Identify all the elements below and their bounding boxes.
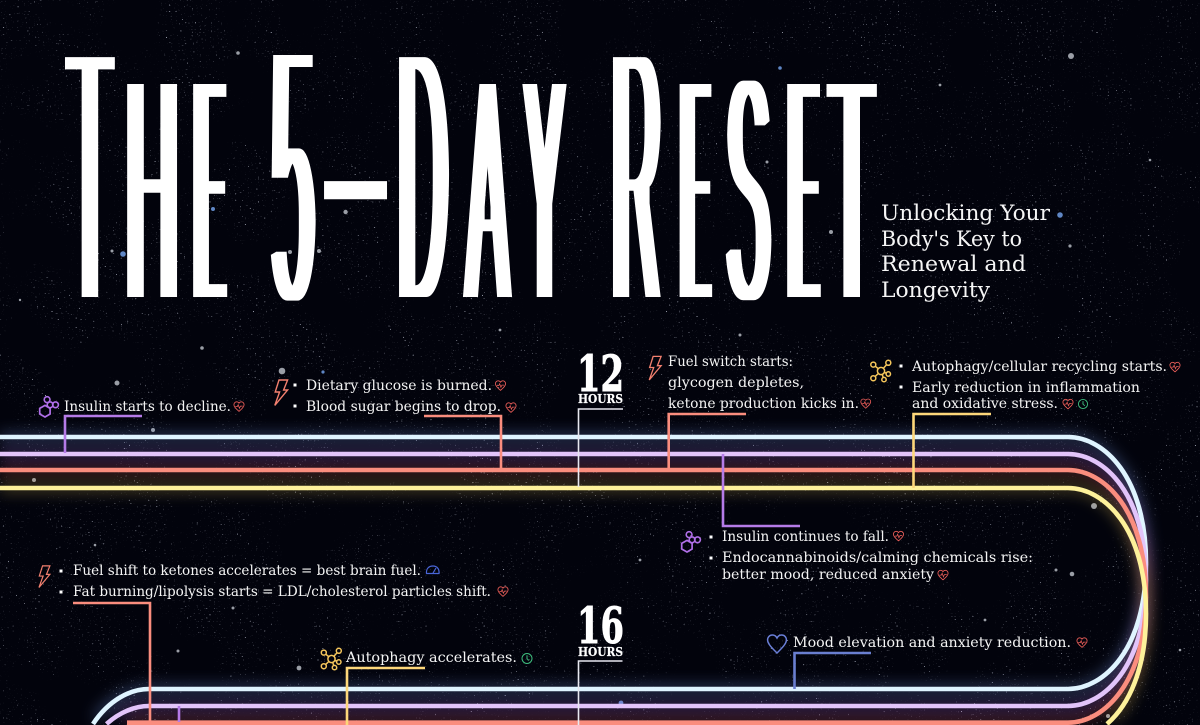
icon: lightning bolt [649, 356, 661, 380]
callout: insulin continues to fall: better mood, reduced anxiety [722, 567, 935, 583]
icon: heart pulse [498, 587, 508, 596]
track: lilac [0, 454, 1146, 724]
icon: network [321, 648, 341, 670]
callout: fuel shift to ketones [39, 563, 508, 722]
icon: heart pulse [495, 381, 506, 390]
callout: autophagy starts [871, 359, 1180, 488]
subtitle [881, 201, 1051, 303]
callout: fuel switch: Fuel switch starts: [668, 354, 793, 370]
connector [914, 414, 991, 488]
connector [73, 603, 150, 722]
16 hours marker [577, 596, 624, 725]
callout: insulin continues to fall [682, 454, 1033, 583]
callout: insulin starts to decline: Insulin starts to decline. [64, 399, 231, 415]
icon: clock [522, 654, 532, 664]
timeline: four coloured tracks [0, 437, 1146, 724]
icon: heart pulse [938, 570, 948, 580]
icon: brain gauge [426, 566, 439, 574]
connector [794, 653, 871, 689]
subtitle: Body's Key to [881, 227, 1022, 252]
callout: insulin continues to fall: Endocannabinoids/calming chemicals rise: [722, 550, 1033, 566]
12 hours marker [577, 344, 624, 487]
callout: fuel shift to ketones: Fat burning/lipolysis starts = LDL/cholesterol particles shift. [73, 584, 491, 600]
icon: heart pulse [861, 399, 871, 408]
connector [723, 454, 800, 526]
connector [347, 668, 425, 725]
subtitle: Unlocking Your [881, 201, 1051, 226]
title: E [682, 9, 708, 375]
16 hours marker: 16 [577, 596, 624, 655]
icon: lightning bolt [39, 566, 50, 587]
icon: heart pulse [234, 402, 244, 411]
subtitle: Longevity [881, 278, 991, 303]
callout: dietary glucose [275, 378, 516, 470]
callout: fuel switch: ketone production kicks in. [668, 396, 859, 412]
callout: autophagy starts: and oxidative stress. [912, 396, 1058, 412]
callout: autophagy accelerates [321, 648, 532, 725]
connector [65, 416, 142, 453]
connector [669, 414, 746, 470]
track: pale blue [0, 437, 1146, 724]
title: H [126, 9, 178, 375]
callout: fuel switch [649, 354, 871, 470]
title: Y [525, 9, 564, 375]
icon: heart pulse [1170, 362, 1180, 372]
glow behind timeline lines [0, 437, 1146, 721]
icon: lightning bolt [275, 380, 288, 405]
callout: autophagy starts: Early reduction in inflammation [912, 380, 1140, 396]
connector: lower lilac tick [178, 706, 180, 722]
track: yellow [0, 488, 1146, 724]
icon: heart pulse [1063, 399, 1073, 409]
callout: autophagy starts: Autophagy/cellular recycling starts. [911, 359, 1167, 375]
callout: fuel switch: glycogen depletes, [668, 375, 804, 391]
callout: insulin continues to fall: Insulin continues to fall. [722, 529, 889, 545]
icon: heart outline [768, 635, 786, 653]
callout: fuel shift to ketones: Fuel shift to ketones accelerates = best brain fuel. [73, 563, 421, 579]
callout: dietary glucose: Dietary glucose is burned. [306, 378, 492, 394]
icon: clock [1078, 399, 1088, 409]
connector [424, 416, 501, 470]
title: S [727, 9, 769, 375]
12 hours marker: 12 [577, 344, 624, 403]
icon: heart pulse [506, 403, 516, 412]
icon: molecule [682, 532, 700, 552]
title: E [196, 9, 223, 375]
12 hours marker: HOURS [578, 391, 623, 406]
icon: molecule [40, 397, 58, 417]
callout: autophagy accelerates: Autophagy accelerates. [345, 650, 517, 666]
icon: heart pulse [1077, 638, 1087, 647]
track: salmon [0, 470, 1146, 723]
icon: network [871, 360, 891, 382]
callout: insulin starts to decline [40, 397, 244, 453]
title: E [790, 9, 817, 375]
callout: dietary glucose: Blood sugar begins to drop. [306, 399, 501, 415]
subtitle: Renewal and [881, 252, 1026, 277]
title: T [830, 9, 874, 375]
callout: mood elevation [768, 635, 1087, 689]
icon: heart pulse [893, 531, 904, 541]
callout: mood elevation: Mood elevation and anxiety reduction. [793, 635, 1071, 651]
16 hours marker: HOURS [578, 644, 623, 659]
title [68, 0, 874, 402]
title: A [467, 9, 508, 375]
